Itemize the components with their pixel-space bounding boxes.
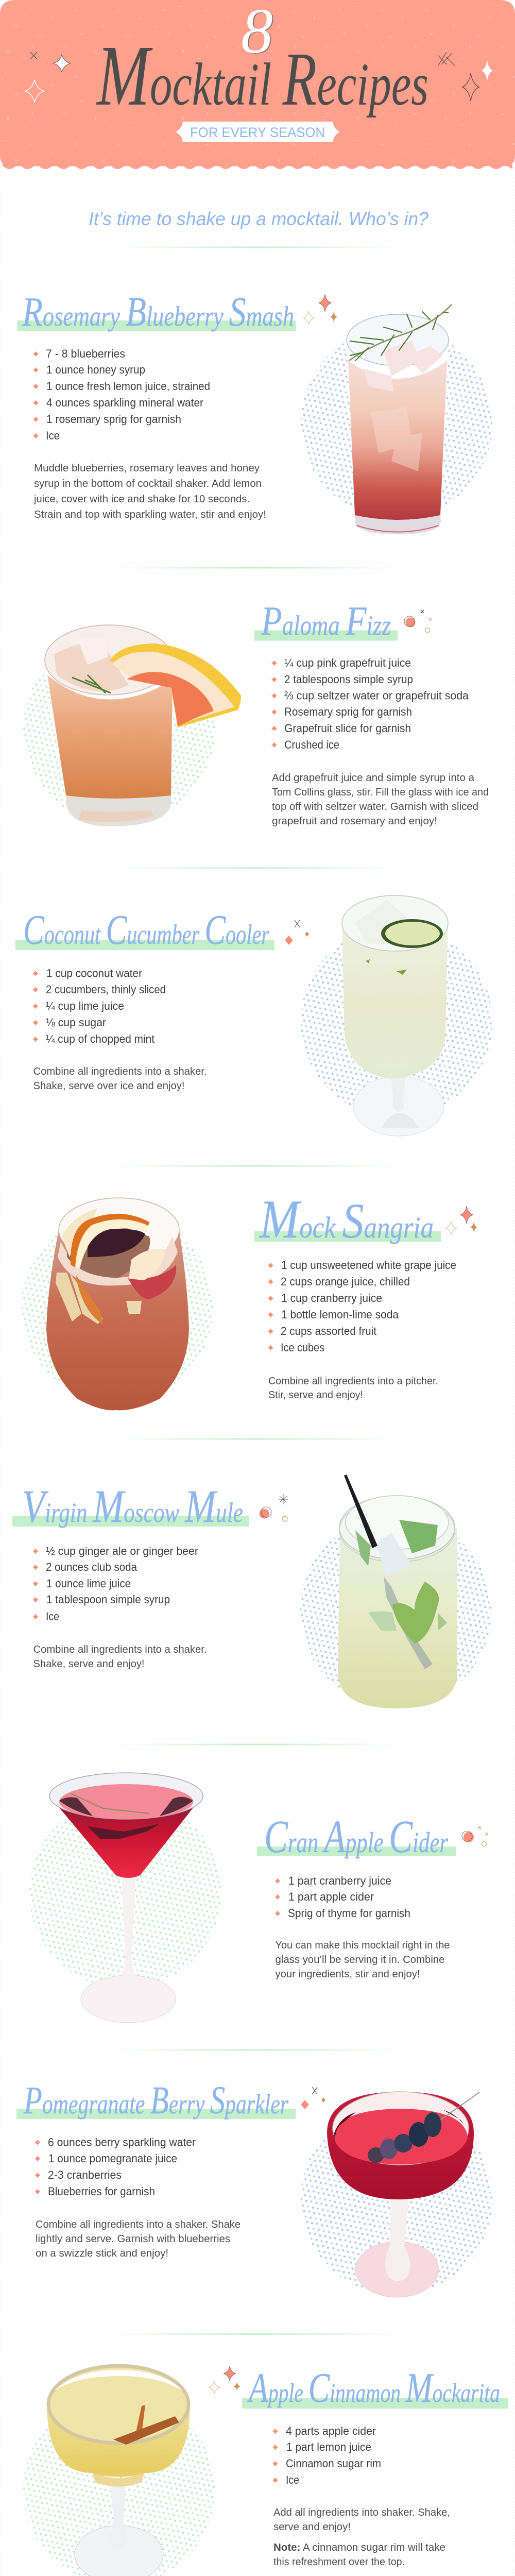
instructions: grapefruit and rosemary and enjoy! bbox=[272, 815, 437, 827]
heading highlight bar bbox=[257, 1846, 456, 1856]
heading: Cran Apple Cider bbox=[264, 1811, 448, 1862]
dotted circle backdrop bbox=[301, 327, 492, 519]
ingredients list bbox=[272, 2425, 381, 2486]
note: this refreshment over the top. bbox=[273, 2556, 405, 2568]
heading highlight bar bbox=[16, 2109, 296, 2119]
dotted circle backdrop bbox=[301, 926, 492, 1117]
ingredients list: 2 tablespoons simple syrup bbox=[284, 673, 413, 686]
header sparkles right bbox=[438, 52, 493, 101]
illustration: martini glass bbox=[49, 1773, 203, 2023]
heading: Apple Cinnamon Mockarita bbox=[247, 2364, 500, 2411]
instructions: Combine all ingredients into a shaker. bbox=[33, 1065, 207, 1077]
ingredients list bbox=[275, 1874, 410, 1920]
illustration: wine glass with blueberries bbox=[327, 2092, 479, 2297]
ingredients list bbox=[33, 967, 166, 1045]
heading: Virgin Moscow Mule bbox=[22, 1481, 243, 1532]
instructions bbox=[268, 1375, 438, 1401]
ingredients list: 4 parts apple cider bbox=[286, 2425, 376, 2437]
ingredients list bbox=[268, 1259, 456, 1354]
ingredients list bbox=[271, 656, 469, 751]
instructions bbox=[33, 462, 266, 520]
ingredients list bbox=[33, 347, 210, 442]
icon: star and circles bbox=[260, 1494, 288, 1521]
illustration: champagne flute with cucumber bbox=[342, 895, 448, 1136]
illustration: margarita glass with cinnamon bbox=[47, 2366, 190, 2576]
instructions: Add grapefruit juice and simple syrup into a bbox=[272, 772, 475, 784]
ingredients list: 1 cup unsweetened white grape juice bbox=[281, 1259, 456, 1272]
panel: Paloma Fizz bbox=[23, 599, 489, 827]
ingredients list: 1 part apple cider bbox=[288, 1890, 374, 1903]
note bbox=[273, 2541, 445, 2568]
intro line: It’s time to shake up a mocktail. Who’s in? bbox=[89, 208, 428, 229]
ingredients list: Crushed ice bbox=[284, 738, 339, 751]
instructions: Shake, serve and enjoy! bbox=[33, 1658, 144, 1670]
panel: Apple Cinnamon Mockarita bbox=[23, 2364, 508, 2576]
ingredients list bbox=[35, 2136, 196, 2198]
ingredients list: 1 rosemary sprig for garnish bbox=[46, 413, 181, 426]
heading highlight bar bbox=[17, 320, 296, 331]
icon: sparkles bbox=[303, 294, 337, 325]
title: Mocktail Recipes: Mocktail Recipes bbox=[96, 28, 428, 124]
panel: Mock Sangria bbox=[22, 1189, 477, 1410]
icon: sparkles bbox=[446, 1206, 477, 1235]
header banner bbox=[0, 0, 515, 170]
ingredients list: ¼ cup of chopped mint bbox=[46, 1032, 154, 1045]
instructions bbox=[272, 772, 489, 827]
instructions bbox=[36, 2218, 241, 2259]
instructions: Add all ingredients into shaker. Shake, bbox=[273, 2506, 450, 2518]
heading highlight bar bbox=[12, 1516, 249, 1527]
ingredients list: 4 ounces sparkling mineral water bbox=[46, 396, 203, 409]
instructions: You can make this mocktail right in the bbox=[275, 1939, 450, 1951]
heading highlight bar bbox=[15, 940, 274, 950]
ingredients list: Blueberries for garnish bbox=[48, 2185, 155, 2198]
ingredients list: 6 ounces berry sparkling water bbox=[48, 2136, 196, 2148]
ingredients list: 2 cups orange juice, chilled bbox=[281, 1275, 410, 1288]
panel: Coconut Cucumber Cooler bbox=[15, 895, 492, 1136]
ingredients list: 2 cucumbers, thinly sliced bbox=[46, 983, 166, 996]
ingredients list: 1 ounce lime juice bbox=[46, 1577, 131, 1590]
instructions: syrup in the bottom of cocktail shaker. Add lemon bbox=[34, 478, 262, 489]
panel: Rosemary Blueberry Smash bbox=[17, 290, 492, 534]
instructions: Combine all ingredients into a pitcher. bbox=[268, 1375, 438, 1387]
ingredients list: 1 ounce pomegranate juice bbox=[48, 2152, 177, 2165]
heading: Coconut Cucumber Cooler bbox=[23, 906, 270, 953]
illustration: sangria glass bbox=[46, 1198, 189, 1410]
instructions: Strain and top with sparkling water, stir and enjoy! bbox=[34, 509, 266, 520]
ingredients list: ½ cup ginger ale or ginger beer bbox=[46, 1545, 198, 1557]
instructions: lightly and serve. Garnish with blueberries bbox=[36, 2233, 230, 2245]
ingredients list: 1 part cranberry juice bbox=[288, 1874, 391, 1887]
icon: diamonds and cross bbox=[285, 920, 309, 945]
panel: Pomegranate Berry Sparkler bbox=[16, 2079, 492, 2297]
panel: Cran Apple Cider bbox=[29, 1773, 488, 2023]
subtitle badge: for every season bbox=[176, 122, 340, 142]
ingredients list: 2-3 cranberries bbox=[48, 2168, 122, 2181]
instructions: Combine all ingredients into a shaker. Shake bbox=[36, 2218, 241, 2230]
ingredients list: 2 ounces club soda bbox=[46, 1561, 138, 1573]
ingredients list: Ice bbox=[46, 429, 60, 442]
heading: Mock Sangria bbox=[259, 1189, 434, 1249]
heading: Pomegranate Berry Sparkler bbox=[23, 2079, 289, 2122]
ingredients list: ⅔ cup seltzer water or grapefruit soda bbox=[284, 689, 469, 702]
panel: Virgin Moscow Mule bbox=[12, 1475, 491, 1708]
ingredients list: 1 tablespoon simple syrup bbox=[46, 1593, 170, 1606]
illustration: paloma glass with grapefruit bbox=[44, 625, 241, 826]
instructions: top off with seltzer water. Garnish with sliced bbox=[272, 801, 478, 812]
ingredients list: Ice bbox=[286, 2473, 299, 2486]
ingredients list: Ice bbox=[46, 1610, 59, 1623]
ingredients list: ⅛ cup sugar bbox=[46, 1016, 106, 1029]
ingredients list: 1 part lemon juice bbox=[286, 2441, 371, 2453]
instructions: on a swizzle stick and enjoy! bbox=[36, 2247, 168, 2259]
illustration: rosemary blueberry glass bbox=[347, 304, 452, 534]
instructions: Combine all ingredients into a shaker. bbox=[33, 1643, 207, 1655]
dotted circle backdrop bbox=[23, 633, 215, 825]
heading: Paloma Fizz bbox=[261, 599, 391, 644]
heading highlight bar bbox=[254, 1231, 441, 1242]
heading highlight bar bbox=[242, 2398, 508, 2409]
instructions: Stir, serve and enjoy! bbox=[268, 1389, 363, 1401]
ingredients list: 1 bottle lemon-lime soda bbox=[281, 1308, 399, 1321]
instructions bbox=[273, 2506, 450, 2533]
icon: sparkles bbox=[209, 2366, 241, 2394]
ingredients list: Ice cubes bbox=[281, 1341, 324, 1354]
ingredients list: ¼ cup lime juice bbox=[46, 999, 124, 1012]
dotted circle backdrop bbox=[23, 2394, 215, 2576]
instructions bbox=[33, 1065, 207, 1092]
instructions: your ingredients, stir and enjoy! bbox=[275, 1968, 420, 1980]
dotted circle backdrop bbox=[22, 1211, 213, 1403]
icon: diamonds and cross bbox=[301, 2087, 325, 2109]
instructions: Tom Collins glass, stir. Fill the glass with ice and bbox=[272, 786, 489, 798]
subtitle badge: for every season: FOR EVERY SEASON bbox=[190, 125, 325, 140]
ingredients list: 1 cup coconut water bbox=[46, 967, 142, 980]
ingredients list: Cinnamon sugar rim bbox=[286, 2457, 381, 2470]
instructions: juice, cover with ice and shake for 10 seconds. bbox=[33, 493, 250, 505]
dotted circle backdrop bbox=[301, 2103, 492, 2295]
instructions: serve and enjoy! bbox=[273, 2521, 351, 2533]
ingredients list: ¼ cup pink grapefruit juice bbox=[284, 656, 411, 669]
ingredients list bbox=[33, 1545, 198, 1623]
ingredients list: 7 - 8 blueberries bbox=[46, 347, 125, 360]
icon: circles and crosses bbox=[404, 610, 432, 633]
instructions: glass you’ll be serving it in. Combine bbox=[275, 1954, 445, 1965]
ingredients list: Sprig of thyme for garnish bbox=[288, 1907, 410, 1920]
heading: Rosemary Blueberry Smash bbox=[22, 290, 294, 335]
ingredients list: 2 cups assorted fruit bbox=[281, 1325, 376, 1337]
dotted circle backdrop bbox=[29, 1797, 221, 1989]
ingredients list: 1 ounce fresh lemon juice, strained bbox=[46, 380, 210, 393]
ingredients list: Grapefruit slice for garnish bbox=[284, 722, 411, 735]
note: Note: A cinnamon sugar rim will take bbox=[273, 2541, 445, 2553]
ingredients list: 1 cup cranberry juice bbox=[281, 1292, 382, 1304]
instructions: Muddle blueberries, rosemary leaves and honey bbox=[34, 462, 260, 474]
ingredients list: Rosemary sprig for garnish bbox=[284, 705, 412, 718]
dotted circle backdrop bbox=[300, 1515, 491, 1707]
header sparkles left bbox=[25, 52, 71, 103]
instructions bbox=[275, 1939, 450, 1980]
heading highlight bar bbox=[254, 631, 398, 641]
ingredients list: 1 ounce honey syrup bbox=[46, 363, 145, 376]
illustration: mason jar with mint and straw bbox=[338, 1475, 457, 1708]
instructions bbox=[33, 1643, 207, 1670]
icon: circles and crosses bbox=[462, 1826, 488, 1846]
instructions: Shake, serve over ice and enjoy! bbox=[33, 1080, 184, 1092]
